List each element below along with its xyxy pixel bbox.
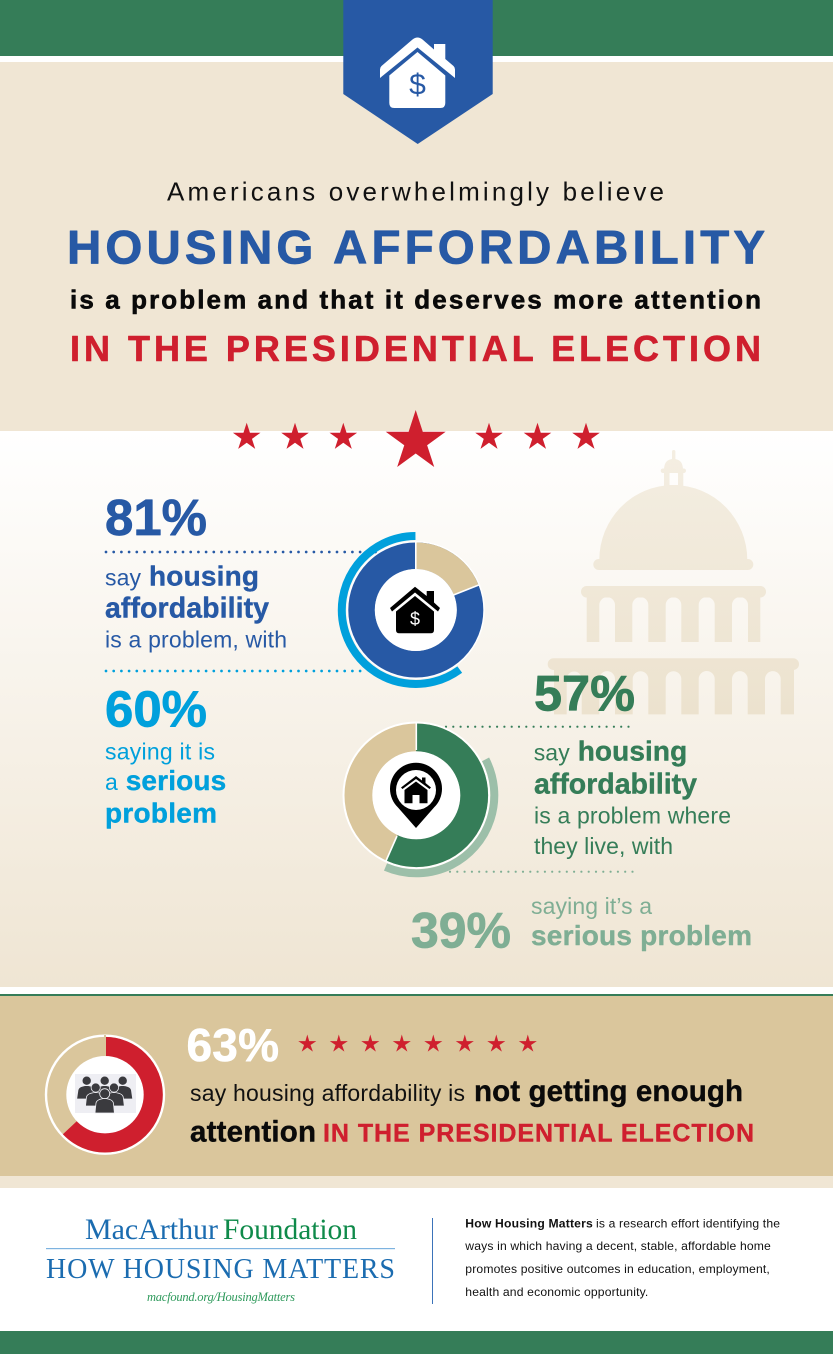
attention statement text: not getting enough <box>474 1075 743 1108</box>
title: is a problem and that it deserves more attention <box>70 284 761 314</box>
logo: MacArthur Foundation How Housing Matters: Foundation <box>223 1214 357 1246</box>
attention statement text: say housing affordability is <box>190 1080 465 1106</box>
title: HOUSING AFFORDABILITY <box>67 221 765 274</box>
icon: group of people <box>75 1074 136 1113</box>
stat: 81 percent: housing <box>149 561 259 592</box>
icon: house with dollar: $ <box>409 68 426 101</box>
header panel background <box>0 62 833 431</box>
stat: 81 percent: 81% <box>105 489 207 546</box>
stat: 60 percent: problem <box>105 797 217 828</box>
stat: 81 percent: affordability <box>105 592 269 624</box>
footer description: health and economic opportunity. <box>465 1285 648 1299</box>
stat: 60 percent: 60% <box>105 681 207 738</box>
icon: capitol building watermark <box>548 450 799 714</box>
donut chart: 81 percent <box>312 507 519 713</box>
attention statement text: attention <box>190 1116 316 1148</box>
logo: MacArthur Foundation How Housing Matters: macfound.org/HousingMatters <box>147 1290 295 1304</box>
title: IN THE PRESIDENTIAL ELECTION <box>70 328 761 369</box>
footer description: ways in which having a decent, stable, affordable home <box>464 1239 771 1253</box>
stat: 57 percent: say <box>534 740 570 766</box>
title: Americans overwhelmingly believe <box>167 177 664 207</box>
footer description: promotes positive outcomes in education, employment, <box>465 1262 770 1276</box>
stat: 57 percent: is a problem where <box>534 802 731 828</box>
stat: 60 percent: saying it is <box>105 738 215 764</box>
middle panel gradient background <box>0 431 833 987</box>
row of red stars <box>233 410 600 467</box>
stat: 60 percent: a <box>105 769 118 795</box>
icon: black house with dollar: $ <box>410 609 420 629</box>
stat: 39 percent: saying it’s a <box>531 893 652 919</box>
attention statement text: IN THE PRESIDENTIAL ELECTION <box>323 1120 754 1148</box>
dotted leaders: left block <box>106 552 376 671</box>
stat: 39 percent: serious problem <box>531 920 752 951</box>
stat: 63 percent: 63% <box>186 1019 279 1071</box>
donut chart: 63 percent <box>46 1035 164 1154</box>
panel: attention in the election <box>0 996 833 1176</box>
stat: 57 percent: they live, with <box>534 833 673 859</box>
logo: MacArthur Foundation How Housing Matters: MacArthur <box>85 1213 218 1246</box>
badge with house icon <box>343 0 493 144</box>
dotted leaders: right block <box>446 727 636 872</box>
cream strip below panel <box>0 1176 833 1188</box>
stat: 81 percent: say <box>105 565 142 591</box>
footer description <box>464 1216 780 1299</box>
footer divider <box>432 1218 433 1304</box>
stat: 57 percent <box>534 665 731 859</box>
footer description: is a research effort identifying the <box>596 1216 780 1230</box>
icon: location pin with house <box>390 763 442 828</box>
row of small red stars <box>298 1034 537 1052</box>
thin green rule <box>0 994 833 996</box>
stat: 60 percent: serious <box>126 765 226 796</box>
footer description: How Housing Matters <box>465 1216 593 1230</box>
stat: 81 percent <box>105 489 287 652</box>
bottom green band <box>0 1331 833 1354</box>
stat: 39 percent: 39% <box>411 902 511 958</box>
title <box>67 177 765 369</box>
icon: house with dollar <box>380 38 455 108</box>
icon: black house with dollar <box>390 587 440 633</box>
logo: MacArthur Foundation How Housing Matters: HOW HOUSING MATTERS <box>46 1254 395 1285</box>
logo: MacArthur Foundation How Housing Matters <box>46 1213 395 1304</box>
attention statement text <box>190 1075 754 1148</box>
stat: 57 percent: housing <box>578 736 687 767</box>
stat: 57 percent: affordability <box>534 768 697 800</box>
top green band <box>0 0 833 56</box>
stat: 57 percent: 57% <box>534 665 635 722</box>
donut chart: 57 percent <box>311 690 521 900</box>
stat: 81 percent: is a problem, with <box>105 626 287 652</box>
stat: 39 percent <box>411 893 752 958</box>
stat: 60 percent <box>105 681 226 828</box>
